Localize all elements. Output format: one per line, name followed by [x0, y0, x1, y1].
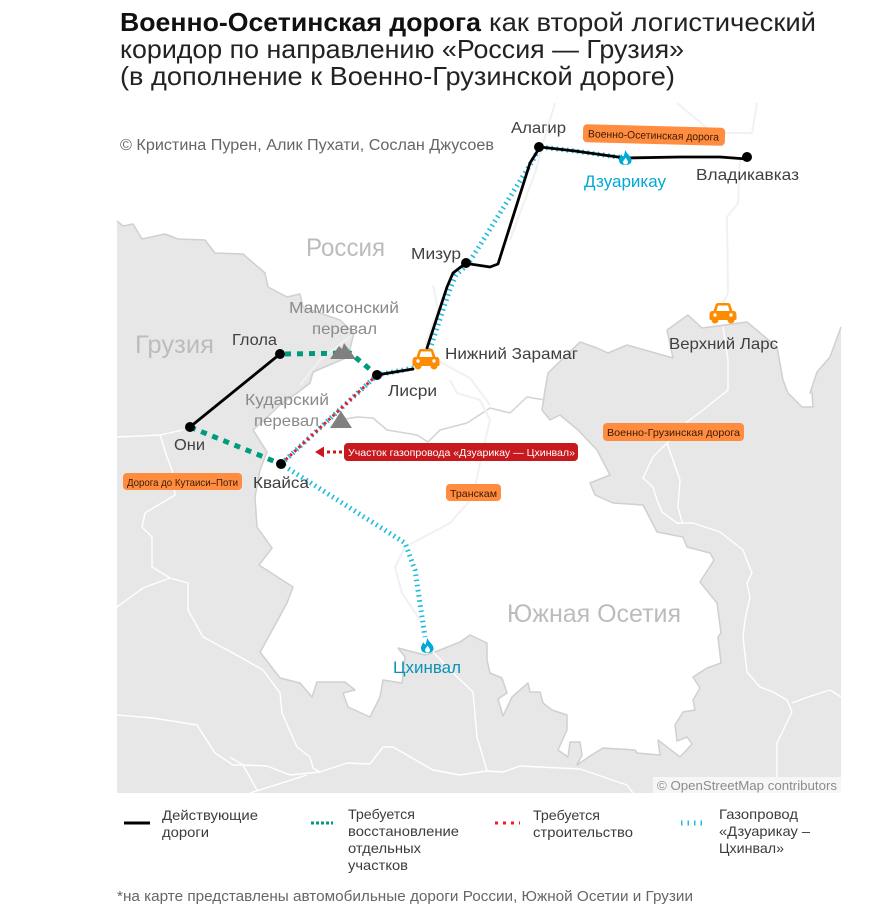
border: Georgia outline [117, 221, 841, 765]
legend item: restoration: участков [348, 857, 408, 873]
legend item: restoration: Требуется [348, 806, 415, 822]
legend item: restoration [311, 806, 459, 873]
city labels: Глола [232, 332, 277, 349]
route: gas pipeline [281, 147, 625, 637]
legend item: construction: Требуется [533, 807, 600, 823]
road tag: Voenno-Osetinskaya [583, 124, 725, 146]
city labels: Квайса [253, 475, 309, 492]
title: Военно-Осетинская дорога [120, 7, 482, 37]
icon: Kudar pass mountain [330, 411, 352, 428]
road tag: Transkam: Транскам [450, 488, 497, 500]
country labels: Грузия [135, 331, 214, 359]
title [120, 7, 816, 91]
arrow: callout pointer [315, 446, 342, 458]
legend item: operating roads [124, 807, 258, 840]
pass labels [245, 300, 399, 430]
map background [117, 103, 841, 793]
road tag: Transkam [446, 484, 501, 501]
legend item: pipeline: Цхинвал» [719, 840, 784, 856]
icon: flame at Dzuarikau [619, 150, 632, 165]
route: operating roads [190, 147, 747, 427]
footnote: *на карте представлены автомобильные дороги России, Южной Осетии и Грузии [117, 888, 693, 905]
legend item: operating roads: Действующие [162, 807, 258, 823]
region: Georgia fill [117, 221, 841, 793]
callout: pipeline section: Участок газопровода «Дзуарикау — Цхинвал» [348, 447, 575, 459]
road tag: Voenno-Gruzinskaya: Военно-Грузинская дорога [607, 427, 740, 439]
route points [185, 142, 752, 469]
legend item: pipeline: «Дзуарикау – [719, 823, 810, 839]
route: roads to restore [190, 353, 377, 464]
legend item: pipeline: Газопровод [719, 806, 798, 822]
road tag: Kutaisi-Poti: Дорога до Кутаиси–Поти [127, 477, 238, 489]
attribution: © OpenStreetMap contributors [657, 779, 837, 793]
road tag: Kutaisi-Poti [123, 473, 242, 490]
legend item: construction: строительство [533, 824, 633, 840]
country labels: Россия [306, 234, 385, 262]
country labels [135, 234, 681, 628]
city labels: Верхний Ларс [669, 336, 778, 353]
authors: © Кристина Пурен, Алик Пухати, Сослан Джусоев [120, 137, 494, 154]
icon: car at Nizhny Zaramag [412, 349, 440, 370]
route: construction required [281, 375, 377, 464]
legend item: construction [495, 807, 633, 840]
legend [124, 806, 810, 873]
city labels: Алагир [511, 120, 566, 137]
legend item: operating roads: дороги [162, 824, 209, 840]
title: (в дополнение к Военно-Грузинской дороге) [120, 61, 675, 91]
road tag: Voenno-Gruzinskaya [603, 423, 744, 441]
icon: car at Verkhny Lars [710, 303, 736, 324]
label: Dzuarikau: Дзуарикау [584, 173, 667, 191]
pass labels: перевал [312, 321, 377, 338]
city labels: Нижний Зарамаг [445, 346, 578, 363]
road tag: Voenno-Osetinskaya: Военно-Осетинская дорога [588, 128, 719, 144]
title: как второй логистический [489, 7, 816, 37]
title: коридор по направлению «Россия — Грузия» [120, 34, 684, 64]
pass labels: Мамисонский [289, 300, 399, 317]
pass labels: перевал [254, 413, 319, 430]
city labels [174, 120, 799, 492]
city labels: Мизур [411, 246, 461, 263]
pass labels: Кударский [245, 392, 329, 409]
label: Tskhinval: Цхинвал [393, 659, 461, 677]
country labels: Южная Осетия [507, 600, 681, 628]
city labels: Они [174, 437, 205, 454]
roads on white [300, 103, 757, 620]
callout: pipeline section [344, 443, 578, 461]
legend item: restoration: восстановление [348, 823, 459, 839]
border: Russia and South Ossetia [340, 397, 545, 442]
city labels: Владикавказ [696, 167, 799, 184]
icon: Mamison pass mountain [330, 343, 356, 359]
roads on Georgia [117, 327, 841, 793]
legend item: pipeline [681, 806, 810, 856]
city labels: Лисри [388, 383, 437, 400]
icon: flame at Tskhinval [421, 638, 434, 653]
legend item: restoration: отдельных [348, 840, 421, 856]
